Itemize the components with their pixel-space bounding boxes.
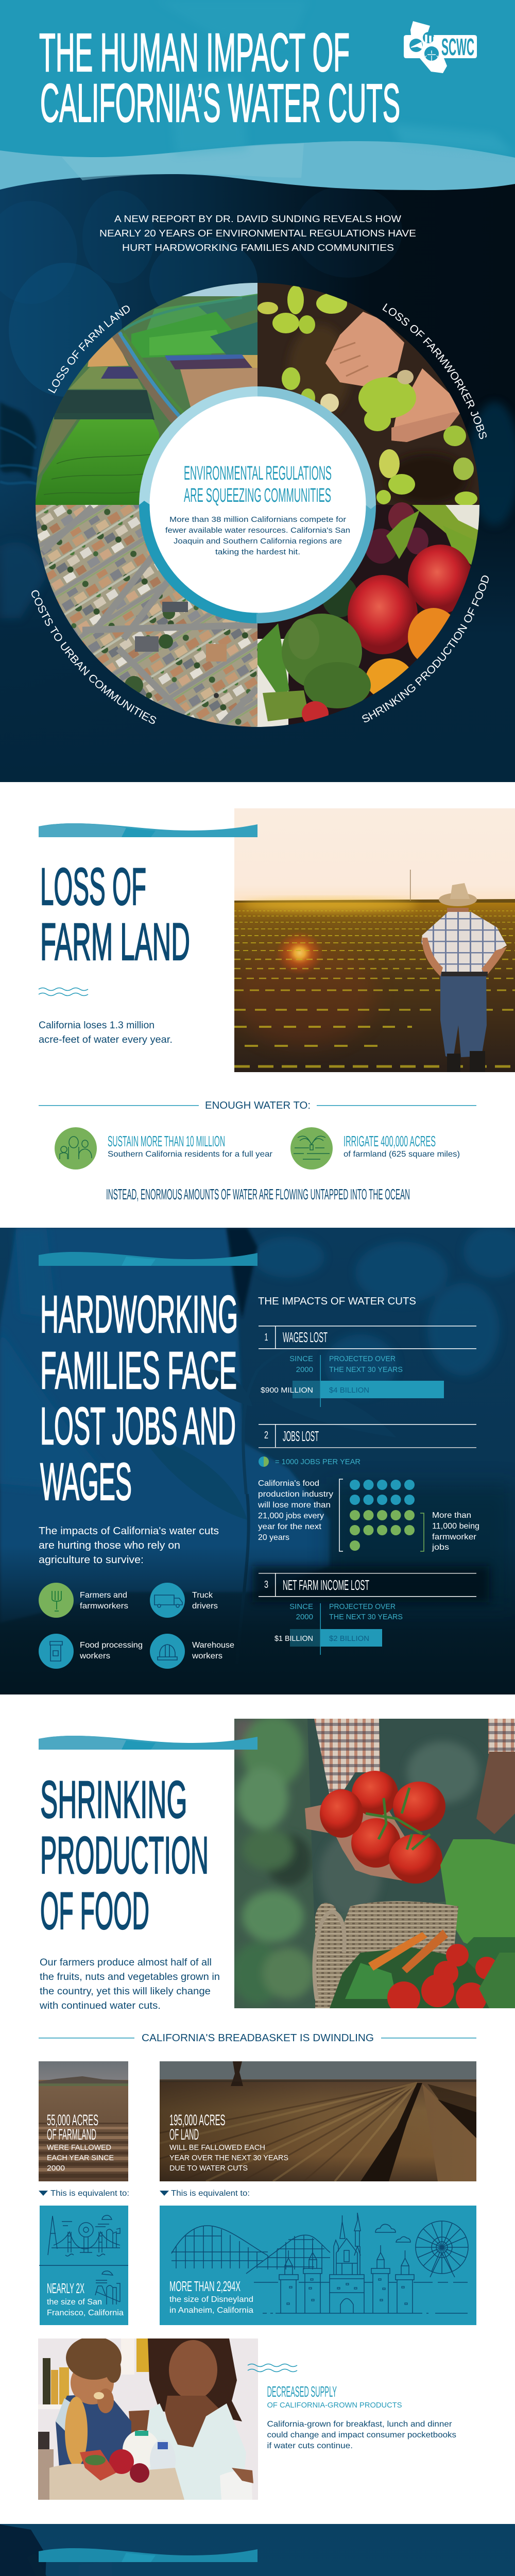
group: truck drivers: drivers	[192, 1602, 218, 1611]
panel: hero	[0, 0, 515, 782]
impact 3: net farm income lost: 3	[264, 1579, 268, 1590]
farmer figure	[421, 883, 507, 1072]
text: decreased supply: could change and impact consumer pocketbooks	[267, 2431, 456, 2439]
plaid sleeves	[314, 1719, 380, 1808]
bar chart: wages	[261, 1355, 444, 1407]
intro text: A NEW REPORT BY DR. DAVID SUNDING REVEALS HOW	[114, 214, 401, 224]
farmworker note	[432, 1511, 479, 1552]
bar chart: wages: $4 BILLION	[329, 1386, 369, 1395]
wave accent	[39, 1252, 258, 1266]
photo card: 55,000 acres: 55,000 ACRES	[47, 2112, 98, 2129]
text: decreased supply: DECREASED SUPPLY	[267, 2384, 337, 2400]
impact 2: jobs lost	[258, 1424, 479, 1552]
subheading: enough water to: ENOUGH WATER TO:	[205, 1100, 311, 1111]
photo: fruit and vegetables	[258, 502, 479, 727]
central circle: ENVIRONMENTAL REGULATIONS	[184, 463, 332, 484]
farmworker note: farmworker	[432, 1533, 477, 1541]
body text: The impacts of California's water cuts	[39, 1526, 219, 1537]
group: farmers: farmworkers	[80, 1602, 128, 1611]
photo: suburb aerial	[36, 505, 258, 727]
impact 3: net farm income lost: SINCE	[289, 1602, 313, 1611]
panel: water supply projects	[0, 2524, 515, 2576]
impact 3: net farm income lost: 2000	[296, 1613, 313, 1621]
impact 3: net farm income lost: NET FARM INCOME LOST	[283, 1577, 369, 1593]
impact 2: jobs lost: JOBS LOST	[283, 1428, 319, 1444]
card: Disneyland: the size of Disneyland	[169, 2295, 253, 2304]
impact 3: net farm income lost: PROJECTED OVER	[329, 1602, 396, 1611]
impact 3: net farm income lost: THE NEXT 30 YEARS	[329, 1613, 403, 1621]
wave accent	[39, 823, 258, 837]
panel: loss of farm land	[39, 808, 515, 1203]
card: Disneyland: in Anaheim, California	[169, 2306, 253, 2315]
group: food processing: Food processing	[80, 1641, 143, 1650]
farmworker note: jobs	[432, 1543, 449, 1552]
panel: hardworking families: LOST JOBS AND	[40, 1397, 236, 1455]
greens and basket	[440, 1839, 515, 1963]
photo card: 55,000 acres: WERE FALLOWED	[47, 2143, 111, 2152]
text: 21,000 jobs every	[258, 1512, 324, 1520]
label: loss of farmworker jobs: LOSS OF FARMWORKER JOBS	[382, 303, 487, 439]
top teal wave	[0, 0, 515, 158]
photo: farmer at sunset	[232, 808, 515, 1072]
bar chart: income: $1 BILLION	[274, 1634, 313, 1643]
icon: Disneyland line art	[171, 2213, 468, 2313]
text: decreased supply	[267, 2384, 456, 2450]
photo card: 195,000 acres: 195,000 ACRES	[169, 2112, 226, 2129]
card: San Francisco	[39, 2206, 128, 2325]
body text: are hurting those who rely on	[39, 1540, 180, 1551]
text: production industry	[258, 1490, 333, 1499]
impact 1: wages lost: THE NEXT 30 YEARS	[329, 1365, 403, 1374]
card: Disneyland: MORE THAN 2,294X	[169, 2278, 241, 2294]
group: warehouse: Warehouse	[192, 1641, 234, 1650]
tomatoes	[352, 1771, 398, 1816]
title	[39, 32, 400, 123]
farmworker note: 11,000 being	[432, 1522, 479, 1531]
impact 1: wages lost: WAGES LOST	[283, 1329, 328, 1345]
central circle: ARE SQUEEZING COMMUNITIES	[184, 485, 331, 506]
card: San Francisco: the size of San	[47, 2298, 102, 2307]
impact 2: jobs lost: 2	[264, 1430, 268, 1441]
stat: farmland	[290, 1127, 460, 1170]
panel: loss of farm land: FARM LAND	[40, 912, 190, 971]
intro text	[99, 214, 416, 253]
legend: = 1000 JOBS PER YEAR	[275, 1458, 360, 1466]
photo card: 55,000 acres: OF FARMLAND	[47, 2126, 96, 2143]
label: shrinking production of food: SHRINKING PRODUCTION OF FOOD	[362, 575, 489, 722]
text: decreased supply: if water cuts continue.	[267, 2442, 353, 2450]
stat: residents: Southern California residents for a full year	[108, 1150, 273, 1159]
text: will lose more than	[258, 1501, 331, 1510]
impact 1: wages lost: 1	[265, 1332, 268, 1343]
text: California's food	[258, 1479, 319, 1488]
light wave texture	[62, 143, 304, 180]
groceries	[123, 2430, 160, 2469]
group: farmers: Farmers and	[80, 1591, 127, 1600]
stat: residents: SUSTAIN MORE THAN 10 MILLION	[108, 1133, 225, 1150]
panel: hardworking families: HARDWORKING	[40, 1285, 238, 1344]
intro text: NEARLY 20 YEARS OF ENVIRONMENTAL REGULATIONS HAVE	[99, 228, 416, 239]
heading: impacts: THE IMPACTS OF WATER CUTS	[258, 1296, 416, 1307]
heading: WAGES	[40, 1452, 132, 1511]
icon: San Francisco skyline	[48, 2215, 120, 2256]
icon: jar	[39, 1634, 74, 1669]
group: warehouse	[150, 1634, 234, 1669]
icon: pitchfork	[39, 1583, 74, 1618]
farmworker note: More than	[432, 1511, 471, 1520]
photo: farmer with tomatoes and basket	[232, 1716, 515, 2014]
logo: SCWC	[404, 21, 477, 73]
impact 1: wages lost	[259, 1326, 476, 1407]
group: farmers	[39, 1583, 128, 1618]
body text: acre-feet of water every year.	[39, 1035, 173, 1045]
subheading: breadbasket: CALIFORNIA'S BREADBASKET IS DWINDLING	[142, 2032, 374, 2044]
photo: mother and child with groceries	[38, 2336, 258, 2500]
group: food processing	[39, 1634, 143, 1669]
photo card: 195,000 acres: OF LAND	[169, 2126, 199, 2143]
heading	[40, 1770, 209, 1940]
photo card: 55,000 acres: 2000	[47, 2164, 65, 2173]
heading: FAMILIES FACE	[40, 1341, 237, 1400]
squiggle	[248, 2364, 297, 2372]
wave accent	[39, 2548, 258, 2562]
center body text: Joaquin and Southern California regions are	[174, 537, 342, 546]
center body text: More than 38 million Californians compete for	[169, 515, 346, 524]
card: San Francisco: NEARLY 2X	[47, 2280, 84, 2296]
body text: with continued water cuts.	[39, 2001, 161, 2011]
icon: skyline repeat	[95, 2271, 120, 2304]
photo card: 55,000 acres	[39, 2061, 128, 2181]
teal wash texture	[176, 129, 502, 156]
squiggle	[39, 988, 88, 995]
label: loss of farm land: LOSS OF FARM LAND	[48, 306, 130, 394]
body text	[39, 1020, 173, 1045]
bar chart: wages: $900 MILLION	[261, 1386, 313, 1395]
group: food processing: workers	[79, 1652, 110, 1660]
hand	[305, 1792, 422, 1880]
icon: sprinkler	[290, 1127, 333, 1170]
woman	[148, 2338, 242, 2421]
heading: OF FOOD	[40, 1882, 149, 1940]
impact 1: wages lost: PROJECTED OVER	[329, 1354, 396, 1363]
panel: hardworking families	[0, 1226, 515, 1694]
center body text: taking the hardest hit.	[215, 548, 300, 556]
body text: Our farmers produce almost half of all	[40, 1957, 212, 1968]
card: Disneyland	[160, 2206, 476, 2325]
photo: aerial farmland	[34, 283, 258, 506]
impact 1: wages lost: SINCE	[289, 1354, 313, 1363]
stat: farmland: of farmland (625 square miles)	[344, 1150, 460, 1159]
icon: family	[55, 1127, 97, 1170]
background: Los Angeles skyline duotone	[0, 2524, 515, 2576]
center heading	[184, 463, 332, 506]
text: year for the next	[258, 1522, 322, 1531]
photo card: 195,000 acres: DUE TO WATER CUTS	[169, 2164, 248, 2173]
panel: shrinking production of food	[38, 1716, 515, 2500]
label: costs to urban communities: COSTS TO URBAN COMMUNITIES	[31, 590, 157, 724]
body text: the country, yet this will likely change	[40, 1986, 211, 1997]
heading	[40, 1285, 238, 1511]
text	[258, 1479, 333, 1542]
text: 20 years	[258, 1533, 289, 1542]
panel: hero: SCWC	[441, 33, 474, 60]
group: truck drivers	[150, 1583, 218, 1618]
body text: agriculture to survive:	[39, 1554, 144, 1566]
impact 1: wages lost: 2000	[296, 1365, 313, 1374]
light water wave	[0, 141, 515, 190]
text: decreased supply: OF CALIFORNIA-GROWN PRODUCTS	[267, 2401, 402, 2410]
hero dark water background	[0, 165, 515, 782]
photo card: 195,000 acres	[160, 2061, 476, 2181]
body text	[39, 1526, 219, 1566]
intro text: HURT HARDWORKING FAMILIES AND COMMUNITIES	[122, 243, 394, 253]
bar chart: income: $2 BILLION	[329, 1634, 369, 1643]
wave accent	[39, 1736, 258, 1750]
body text: California loses 1.3 million	[39, 1020, 154, 1031]
bar chart: income	[274, 1603, 382, 1655]
photo card: 55,000 acres: EACH YEAR SINCE	[47, 2154, 114, 2162]
central circle	[139, 386, 376, 624]
text: decreased supply: California-grown for breakfast, lunch and dinner	[267, 2420, 452, 2429]
group: truck drivers: Truck	[192, 1591, 213, 1600]
group: warehouse: workers	[192, 1652, 222, 1660]
dot chart	[339, 1479, 424, 1551]
background: hand and seedling duotone	[0, 1226, 515, 1694]
stat: residents	[55, 1127, 273, 1170]
center body text	[165, 515, 350, 556]
heading: LOSS OF	[40, 857, 146, 916]
body text	[39, 1957, 220, 2011]
card: San Francisco: Francisco, California	[47, 2309, 124, 2317]
impact 3: net farm income lost	[259, 1573, 476, 1655]
circle of four photos	[34, 283, 479, 727]
heading: SHRINKING	[40, 1770, 187, 1829]
photo card: 195,000 acres: WILL BE FALLOWED EACH	[169, 2143, 265, 2152]
equivalence note 1: This is equivalent to:	[50, 2189, 129, 2198]
center body text: fewer available water resources. California's San	[165, 526, 350, 535]
photo: farmworker hands and lettuce	[258, 283, 479, 506]
icon: truck	[150, 1583, 185, 1618]
panel: shrinking production of food: PRODUCTION	[40, 1826, 209, 1885]
child	[56, 2393, 131, 2468]
body text: the fruits, nuts and vegetables grown in	[40, 1972, 220, 1982]
equivalence note 2: This is equivalent to:	[171, 2189, 250, 2198]
photo card: 195,000 acres: YEAR OVER THE NEXT 30 YEARS	[169, 2154, 288, 2162]
icon: hard hat	[150, 1634, 185, 1669]
heading	[40, 857, 190, 971]
